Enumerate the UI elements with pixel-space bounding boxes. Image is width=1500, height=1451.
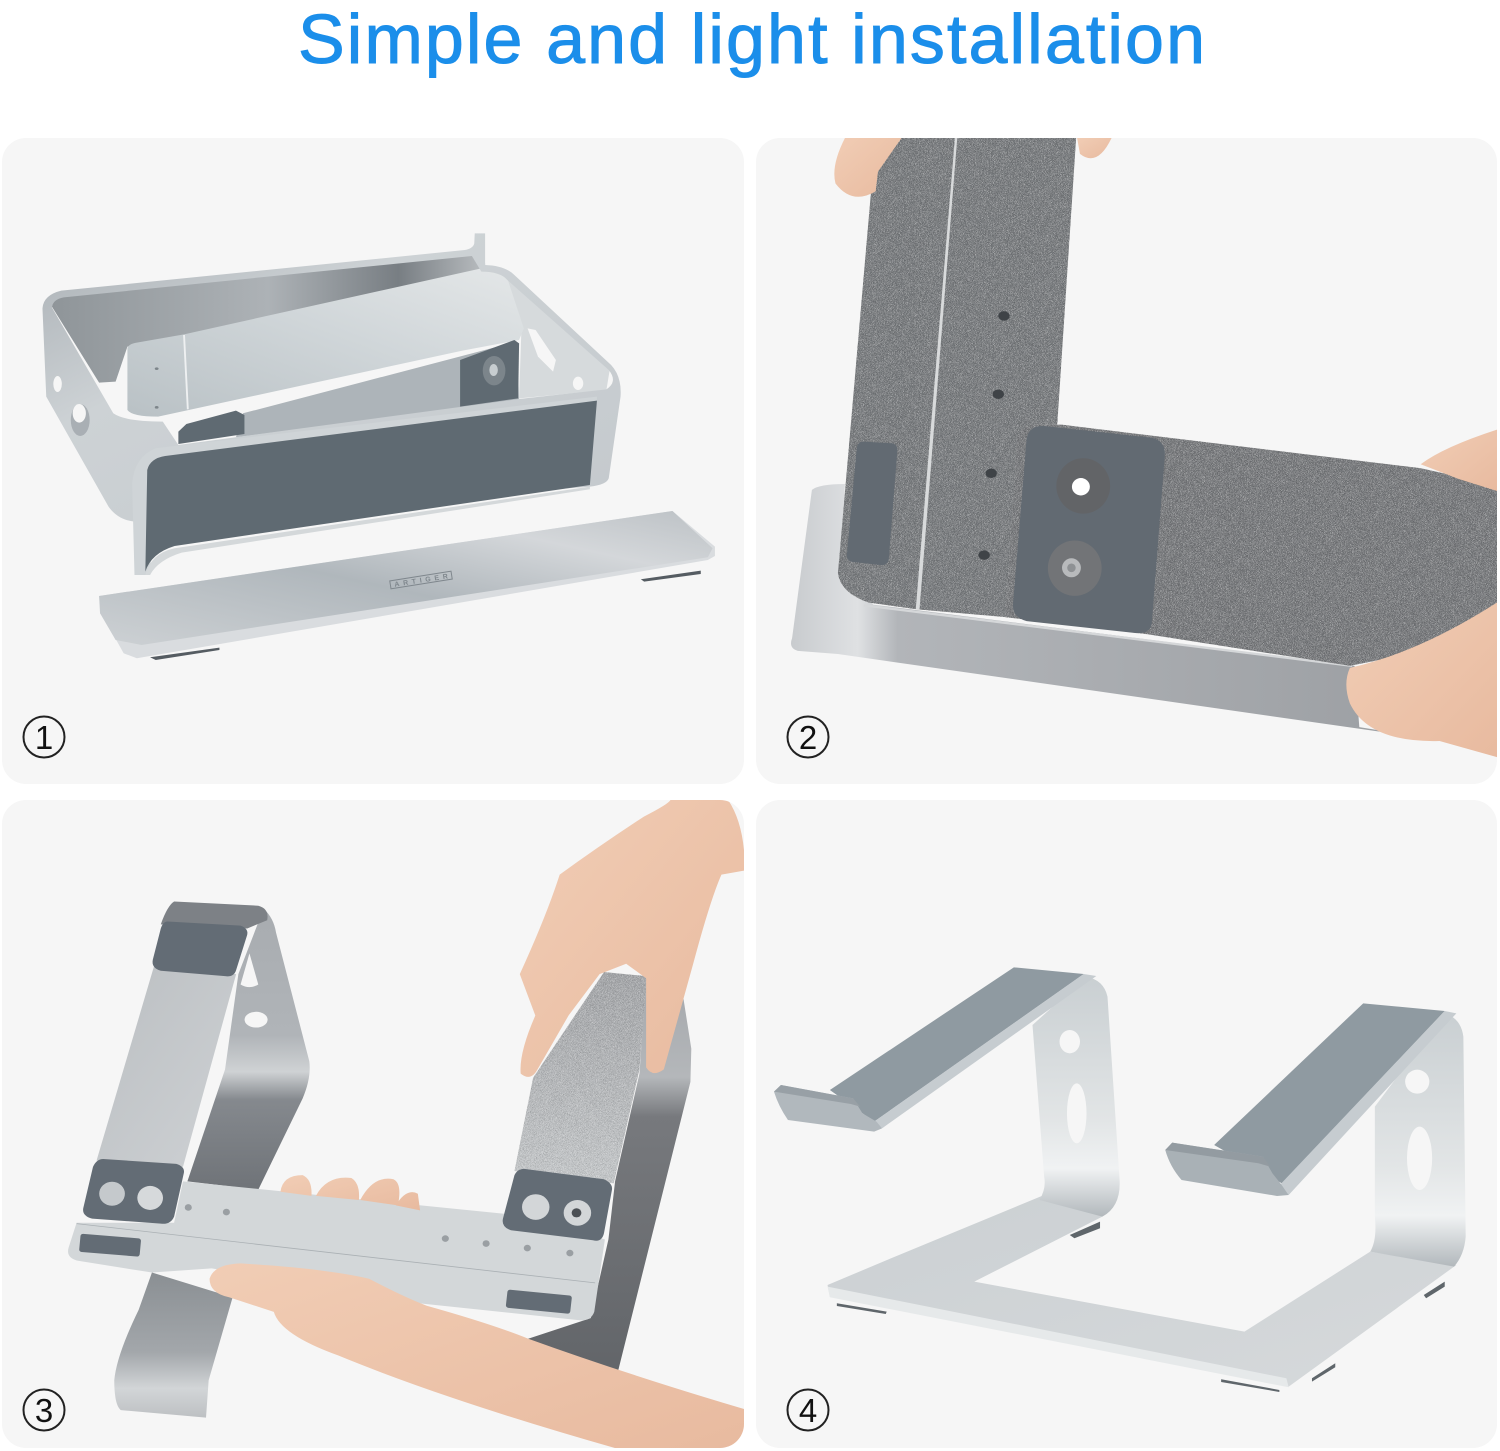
silver frame rim <box>42 233 621 522</box>
silver base bracket <box>791 484 1380 732</box>
illustration: disassembled stand parts <box>42 233 715 660</box>
feet <box>837 1222 1445 1392</box>
dark rubber strip <box>145 401 597 572</box>
logo plate: ARTIGER <box>394 573 448 589</box>
right dark leg <box>528 978 691 1374</box>
left bracket back face <box>187 909 310 1190</box>
step number 2 <box>788 716 828 758</box>
silver lip below strip <box>145 487 590 575</box>
step number 4 <box>788 1390 828 1430</box>
right arm rim <box>1281 1011 1456 1195</box>
base frame <box>828 1195 1456 1387</box>
horizontal speckled plate <box>1005 425 1500 666</box>
panel: step 3 fitting the second bracket <box>2 800 745 1450</box>
bolts <box>99 1182 591 1226</box>
step number 3: 3 <box>35 1392 53 1429</box>
plate top face <box>99 511 713 645</box>
right hand lower <box>1346 601 1500 758</box>
left lip <box>774 1085 882 1132</box>
mounting holes <box>978 311 1010 560</box>
left bracket top cap <box>161 902 268 928</box>
base plate <box>99 511 715 660</box>
plate divider line <box>916 138 957 609</box>
left arm pad <box>830 967 1084 1122</box>
small rubber pad <box>178 411 244 444</box>
front bracket silver edge <box>133 520 151 575</box>
bracket holes <box>241 953 268 1028</box>
base front edge <box>828 1287 1289 1387</box>
illustration: stand with hands <box>68 800 745 1450</box>
plate edge <box>99 511 715 658</box>
left light plate <box>97 966 236 1167</box>
cross plate <box>68 1181 605 1320</box>
second bracket top plate <box>127 268 524 417</box>
small rubber pad <box>847 442 897 565</box>
illustration: plates on base <box>791 138 1500 758</box>
square rubber pad with holes <box>1013 426 1165 633</box>
panel: step 1 parts laid out <box>2 138 744 784</box>
step number 4: 4 <box>799 1392 817 1429</box>
right inner wall of frame <box>508 280 610 398</box>
top left finger <box>834 138 902 197</box>
right lip top edge <box>1165 1143 1270 1167</box>
small holes <box>185 1204 573 1256</box>
right upright <box>1370 1013 1466 1267</box>
plate fold line <box>184 335 188 409</box>
slot holes in frame <box>528 328 556 372</box>
feet <box>150 571 701 660</box>
rubber pad with bolt <box>460 340 519 407</box>
fingers and hands <box>834 138 1500 758</box>
title: Simple and light installation <box>298 0 1205 78</box>
right arm pad <box>1214 1003 1445 1183</box>
right lip <box>1165 1143 1289 1196</box>
upright holes <box>1060 1030 1432 1190</box>
left arm rim <box>874 974 1096 1128</box>
left upright <box>1032 977 1120 1217</box>
plate seam <box>77 1224 595 1283</box>
fingers behind plate <box>280 1175 420 1210</box>
right speckled plate <box>514 972 647 1183</box>
lower left leg <box>114 1273 233 1418</box>
lower hand and arm <box>210 1263 745 1450</box>
step number 1: 1 <box>35 719 53 756</box>
hands <box>210 800 745 1450</box>
panel: step 4 finished stand <box>756 800 1497 1448</box>
step number 1 <box>24 716 64 758</box>
back bracket sheet <box>52 253 485 383</box>
illustration: assembled stand <box>774 967 1466 1392</box>
step number 3 <box>24 1390 64 1430</box>
frame holes <box>53 376 583 436</box>
panel: step 2 attaching the plate <box>756 138 1500 784</box>
small mounting holes <box>155 367 159 409</box>
upper hand <box>520 800 745 1077</box>
top right finger <box>1077 138 1112 158</box>
rubber pads <box>79 921 612 1314</box>
step number 2: 2 <box>799 719 817 756</box>
left lip top edge <box>774 1085 860 1107</box>
right hand upper <box>1421 429 1500 492</box>
vertical speckled plate <box>838 138 1076 617</box>
bracket underside <box>236 342 519 437</box>
base top highlight <box>864 605 1352 666</box>
